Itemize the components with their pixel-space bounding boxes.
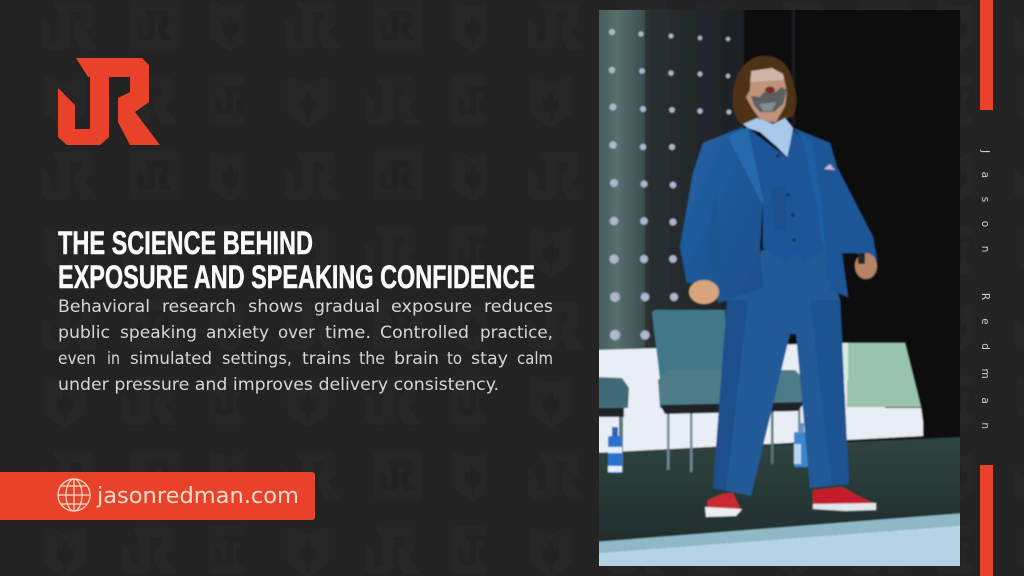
open mouth	[765, 86, 775, 94]
waistcoat	[748, 128, 823, 263]
icon: globe	[58, 479, 90, 511]
body text: in	[107, 349, 120, 369]
pocket square	[824, 164, 835, 170]
body text: Behavioral	[58, 297, 150, 317]
body text: calm	[517, 349, 553, 369]
photo: speaker on stage	[595, 5, 965, 570]
chairs	[595, 310, 805, 472]
body text: shows	[248, 297, 303, 317]
stage front edge	[595, 513, 965, 570]
body text	[58, 297, 553, 395]
backdrop light dots	[609, 29, 731, 340]
body text: anxiety	[206, 323, 269, 343]
stage floor	[595, 437, 965, 542]
body text: gradual	[314, 297, 380, 317]
body text: the	[359, 349, 385, 369]
body text: under pressure and improves delivery consistency.	[58, 375, 499, 395]
beard	[751, 87, 787, 112]
trousers	[713, 250, 849, 496]
backdrop	[599, 10, 960, 452]
face and neck	[746, 68, 787, 122]
body text: research	[162, 297, 236, 317]
red sneakers	[705, 487, 876, 517]
website bar	[0, 472, 315, 520]
shirt collar	[743, 118, 793, 158]
stage steps	[595, 343, 965, 453]
title: THE SCIENCE BEHIND	[58, 225, 313, 261]
water bottles	[608, 423, 808, 473]
hands	[689, 280, 719, 304]
jacket	[680, 127, 877, 303]
website address: jasonredman.com	[96, 484, 299, 509]
title	[58, 225, 535, 295]
body text: exposure	[391, 297, 472, 317]
vertical name label: Jason Redman	[979, 149, 991, 429]
body text: Controlled	[380, 323, 469, 343]
body text: brain	[394, 349, 439, 369]
logo: JR	[58, 58, 160, 145]
body text: stay	[471, 349, 508, 369]
body text: practice,	[480, 323, 553, 343]
side accent bar: bottom	[980, 465, 993, 576]
body text: public	[58, 323, 110, 343]
side accent bar: top	[980, 0, 993, 110]
body text: over	[278, 323, 315, 343]
hair	[733, 56, 796, 125]
body text: simulated	[130, 349, 212, 369]
body text: even	[58, 349, 96, 369]
speaker	[680, 56, 877, 517]
title: EXPOSURE AND SPEAKING CONFIDENCE	[58, 259, 535, 295]
body text: trains	[302, 349, 351, 369]
body text: time.	[325, 323, 371, 343]
body text: speaking	[120, 323, 197, 343]
body text: reduces	[484, 297, 553, 317]
body text: settings,	[222, 349, 292, 369]
body text: to	[447, 349, 462, 369]
